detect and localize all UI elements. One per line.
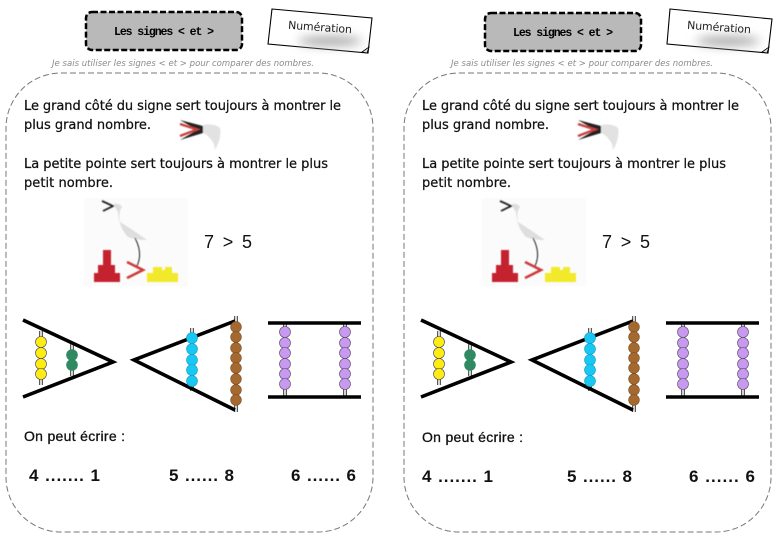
diagram: 5 beads vs 2 beads, greater than bbox=[421, 320, 511, 397]
explanation text bbox=[24, 99, 341, 191]
caption: On peut écrire : bbox=[24, 428, 125, 444]
exercises: 4 ....... 1 bbox=[422, 467, 493, 486]
caption: On peut écrire : bbox=[422, 429, 523, 445]
icon: bird head bbox=[180, 120, 220, 150]
exercises bbox=[422, 467, 755, 486]
exercises: 5 ...... 8 bbox=[169, 466, 234, 485]
dashed content frame bbox=[6, 73, 373, 532]
panel: left worksheet bbox=[6, 9, 373, 532]
diagram: 5 beads vs 8 beads, less than bbox=[134, 316, 241, 412]
explanation text: petit nombre. bbox=[24, 176, 113, 191]
tag: Numération bbox=[667, 9, 772, 53]
diagram: 5 beads vs 2 beads, greater than bbox=[23, 320, 113, 397]
illustration: bird and blocks bbox=[84, 198, 188, 286]
explanation text: Le grand côté du signe sert toujours à montrer le bbox=[422, 99, 739, 114]
objective text: Je sais utiliser les signes < et > pour comparer des nombres. bbox=[449, 59, 713, 69]
icon: bird head bbox=[578, 120, 618, 150]
explanation text: Le grand côté du signe sert toujours à montrer le bbox=[24, 99, 341, 114]
comparison 7 > 5: 7 > 5 bbox=[602, 232, 650, 252]
tag: Numération: Numération bbox=[288, 19, 352, 36]
diagram: 5 beads vs 8 beads, less than bbox=[532, 316, 639, 412]
title box: Les signes < et > bbox=[513, 27, 613, 40]
exercises: 4 ....... 1 bbox=[29, 466, 100, 485]
explanation text: petit nombre. bbox=[422, 176, 511, 191]
title box: Les signes < et > bbox=[114, 26, 214, 39]
title box bbox=[86, 12, 242, 50]
panel: right worksheet bbox=[404, 9, 772, 532]
comparison 7 > 5: 7 > 5 bbox=[204, 232, 252, 252]
exercises: 6 ...... 6 bbox=[689, 467, 755, 486]
exercises: 5 ...... 8 bbox=[567, 467, 632, 486]
explanation text: plus grand nombre. bbox=[24, 118, 151, 133]
objective text: Je sais utiliser les signes < et > pour comparer des nombres. bbox=[50, 59, 314, 69]
explanation text: La petite pointe sert toujours à montrer le plus bbox=[422, 157, 726, 172]
dashed content frame bbox=[404, 73, 771, 532]
explanation text: plus grand nombre. bbox=[422, 118, 549, 133]
title box bbox=[485, 13, 641, 51]
tag: Numération: Numération bbox=[687, 19, 751, 36]
tag: Numération bbox=[268, 9, 372, 53]
diagram: 6 beads vs 6 beads, equal bbox=[666, 323, 759, 397]
diagram: 6 beads vs 6 beads, equal bbox=[268, 323, 361, 397]
explanation text bbox=[422, 99, 739, 191]
explanation text: La petite pointe sert toujours à montrer le plus bbox=[24, 157, 328, 172]
illustration: bird and blocks bbox=[482, 198, 586, 286]
exercises: 6 ...... 6 bbox=[291, 466, 356, 485]
exercises bbox=[29, 466, 356, 485]
